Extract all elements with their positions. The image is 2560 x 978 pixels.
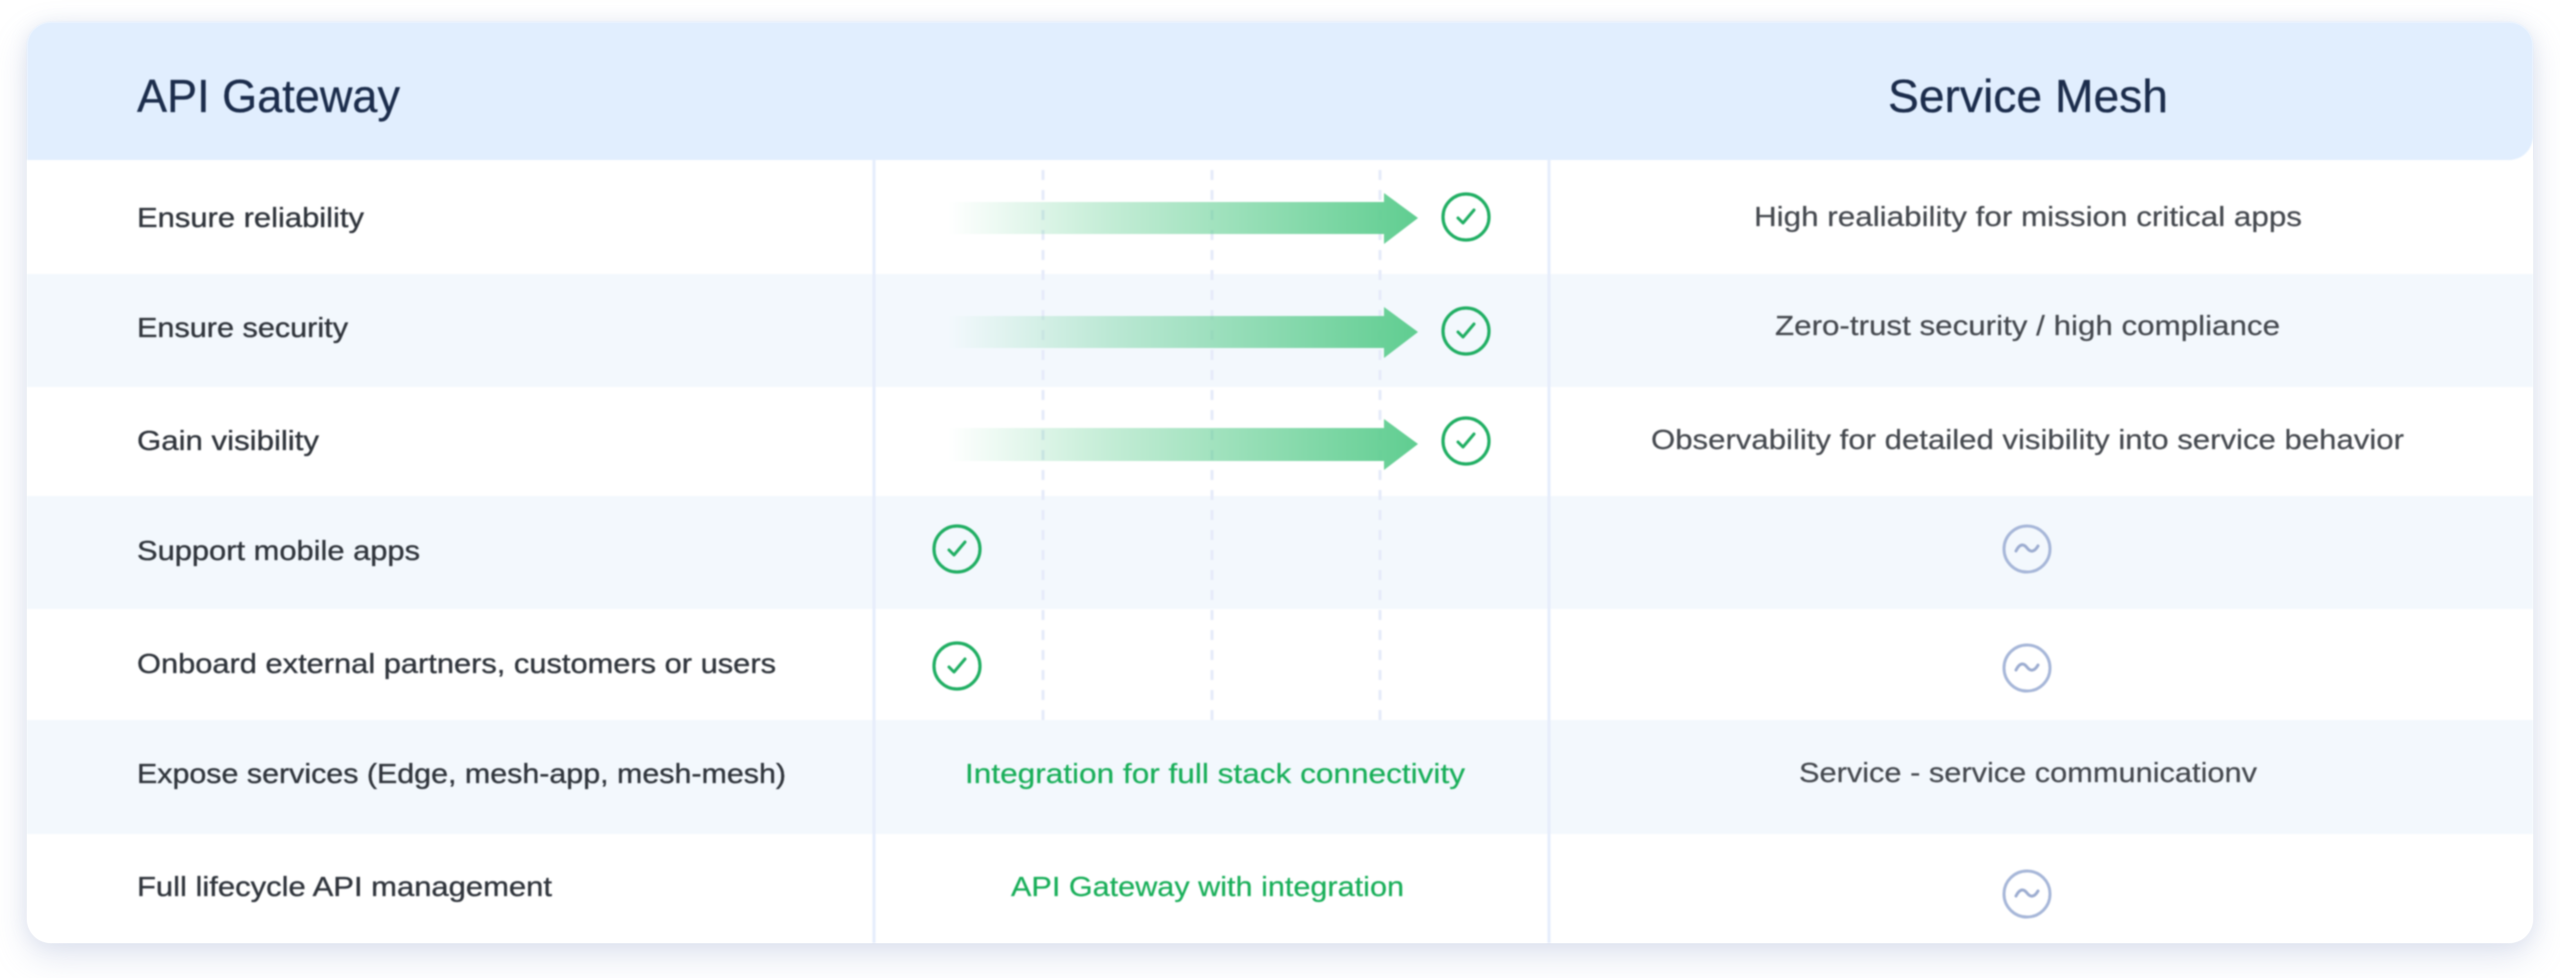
middle text: gateway with integration: API Gateway with integration — [1011, 871, 1404, 902]
icon: check mobile apps — [934, 526, 980, 572]
heading: API Gateway: API Gateway — [137, 70, 400, 122]
icon: partial partners — [2004, 645, 2050, 691]
service mesh: reliability: High realiability for mission critical apps — [1754, 201, 2302, 232]
icon: check visibility — [1443, 418, 1489, 464]
dashed guide lines — [1043, 160, 1380, 720]
label: Support mobile apps: Support mobile apps — [137, 535, 420, 566]
header band — [27, 22, 2533, 160]
label: Ensure security: Ensure security — [137, 312, 348, 343]
label: Gain visibility: Gain visibility — [137, 425, 319, 456]
label: Full lifecycle API management: Full lifecycle API management — [137, 871, 552, 902]
icon: check partners — [934, 643, 980, 689]
label: Ensure reliability: Ensure reliability — [137, 202, 364, 233]
label: Onboard external partners: Onboard external partners, customers or users — [137, 648, 776, 679]
service mesh: security: Zero-trust security / high compliance — [1775, 310, 2280, 341]
row backgrounds — [27, 160, 2533, 943]
icon: partial mobile apps — [2004, 526, 2050, 572]
heading: Service Mesh: Service Mesh — [1888, 70, 2168, 122]
icon: check reliability — [1443, 194, 1489, 240]
column dividers — [874, 160, 1549, 943]
arrow: visibility — [948, 419, 1418, 470]
arrow: security — [948, 307, 1418, 358]
service mesh: visibility: Observability for detailed visibility into service behavior — [1651, 424, 2404, 455]
middle text: full stack connectivity: Integration for full stack connectivity — [965, 758, 1465, 789]
label: Expose services: Expose services (Edge, mesh-app, mesh-mesh) — [137, 758, 786, 789]
icon: partial lifecycle — [2004, 871, 2050, 917]
arrow: reliability — [948, 193, 1418, 244]
service mesh: communication: Service - service communicationv — [1799, 757, 2257, 788]
icon: check security — [1443, 308, 1489, 354]
